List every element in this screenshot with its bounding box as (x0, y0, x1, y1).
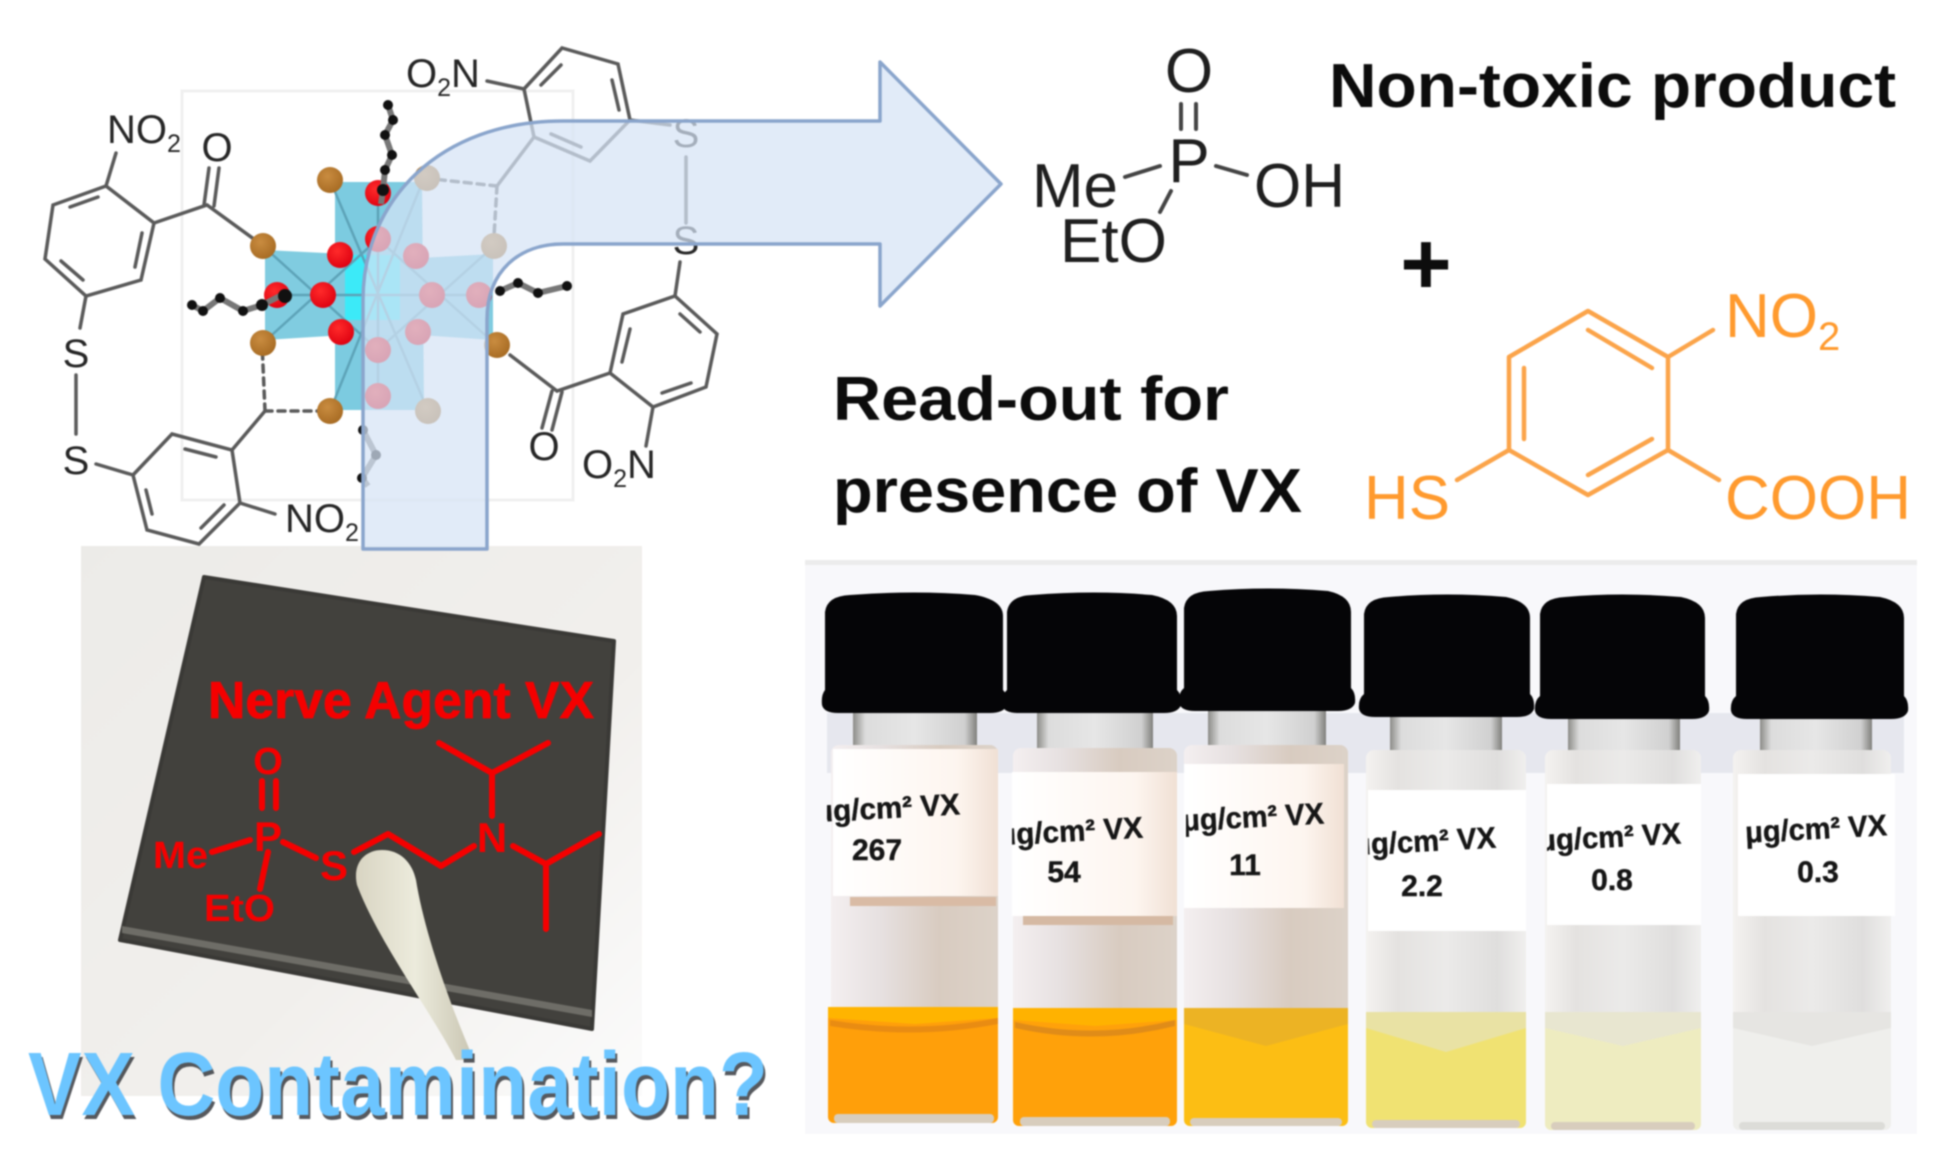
vial 1: 267 (814, 592, 1007, 1123)
panel: contaminated tile photo (81, 546, 642, 1096)
vial 6: 0.3: μg/cm² VX (1744, 809, 1888, 850)
molecule: VX structure (153, 741, 599, 930)
vial 1: 267: μg/cm² VX (814, 788, 961, 829)
photo background (81, 546, 642, 1096)
molecule: VX structure: S (320, 842, 348, 889)
swab (356, 850, 474, 1060)
atom labels: 2 (437, 74, 451, 102)
molecule: VX structure: EtO (204, 888, 275, 930)
molecule: ethyl methylphosphonic acid: P (1168, 127, 1210, 196)
atom labels: S (673, 219, 699, 263)
vial 1: 267: 267 (852, 834, 902, 867)
molecule: ethyl methylphosphonic acid (1032, 37, 1345, 276)
atom labels: 2 (167, 130, 181, 158)
atom labels: 2 (345, 519, 359, 547)
panel: MOF structure with linkers (45, 48, 717, 547)
vial 3: 11: μg/cm² VX (1181, 797, 1325, 838)
backdrop between vial necks (827, 713, 1904, 773)
vial 6: 0.3 (1731, 594, 1908, 1130)
molecule: VX structure: O (253, 741, 283, 783)
atom labels: O (582, 443, 613, 487)
molecule: ethyl methylphosphonic acid: O (1165, 37, 1213, 106)
vial 5: 0.8: 0.8 (1591, 864, 1633, 897)
dark tile (120, 577, 614, 1029)
vial 3: 11: 11 (1229, 849, 1261, 882)
top band (805, 560, 1917, 565)
atom labels: NO (107, 108, 167, 152)
vial 2: 54 (997, 592, 1181, 1126)
molecule: orange thiol read-out product (1364, 282, 1911, 533)
vial 5: 0.8: μg/cm² VX (1537, 818, 1682, 858)
vial 2: 54: 54 (1047, 856, 1081, 889)
oxygen atoms (264, 180, 492, 409)
metal oxide polyhedra (263, 178, 494, 411)
vial 4: 2.2: μg/cm² VX (1352, 822, 1497, 862)
molecule: ethyl methylphosphonic acid: EtO (1060, 207, 1167, 276)
atom labels: O (406, 52, 437, 96)
vial 4: 2.2 (1352, 594, 1534, 1128)
atom labels: O (201, 126, 233, 170)
heading: read-out for presence of VX (833, 365, 1302, 526)
text: VX contamination?: VX Contamination? (28, 1035, 768, 1135)
atom labels: O (528, 425, 560, 469)
tile edge highlight (122, 926, 592, 1017)
copper atoms (250, 165, 510, 424)
text: nerve agent VX: Nerve Agent VX (208, 672, 594, 730)
atom labels (63, 52, 699, 547)
molecule: ethyl methylphosphonic acid: Me (1032, 152, 1118, 221)
vial 3: 11 (1179, 588, 1355, 1126)
molecule: orange thiol read-out product: HS (1364, 464, 1450, 533)
atom labels: S (63, 332, 89, 376)
molecule: orange thiol read-out product: NO (1725, 282, 1818, 351)
molecule: ethyl methylphosphonic acid: OH (1254, 152, 1345, 221)
molecule: orange thiol read-out product: COOH (1725, 464, 1911, 533)
vial 4: 2.2: 2.2 (1401, 870, 1443, 903)
heading: read-out for presence of VX: presence of VX (833, 457, 1302, 526)
heading: read-out for presence of VX: Read-out for (833, 365, 1229, 434)
molecular linker rings and bonds (45, 48, 717, 544)
photo background (805, 565, 1917, 1134)
atom labels: N (627, 443, 656, 487)
heading: non-toxic product: Non-toxic product (1329, 52, 1896, 121)
molecule: VX structure: P (254, 813, 282, 860)
atom labels: N (451, 52, 480, 96)
atom labels: S (63, 439, 89, 483)
atom labels: S (673, 112, 699, 156)
molecule: orange thiol read-out product: 2 (1818, 315, 1840, 359)
molecule: VX structure: Me (153, 835, 208, 877)
vial 2: 54: μg/cm² VX (997, 812, 1144, 852)
vial 5: 0.8 (1535, 594, 1709, 1130)
vial 6: 0.3: 0.3 (1797, 856, 1839, 889)
plus sign: + (1400, 214, 1452, 313)
atom labels: NO (285, 497, 345, 541)
atom labels: 2 (613, 465, 627, 493)
unit cell frame (182, 91, 573, 500)
text: VX contamination?: VX Contamination? (30, 1039, 770, 1139)
panel: vial series photo (805, 560, 1917, 1134)
molecule: VX structure: N (477, 814, 507, 861)
arrow: curved translucent blue reaction arrow (363, 62, 1001, 549)
linker fragments in black (187, 100, 572, 486)
